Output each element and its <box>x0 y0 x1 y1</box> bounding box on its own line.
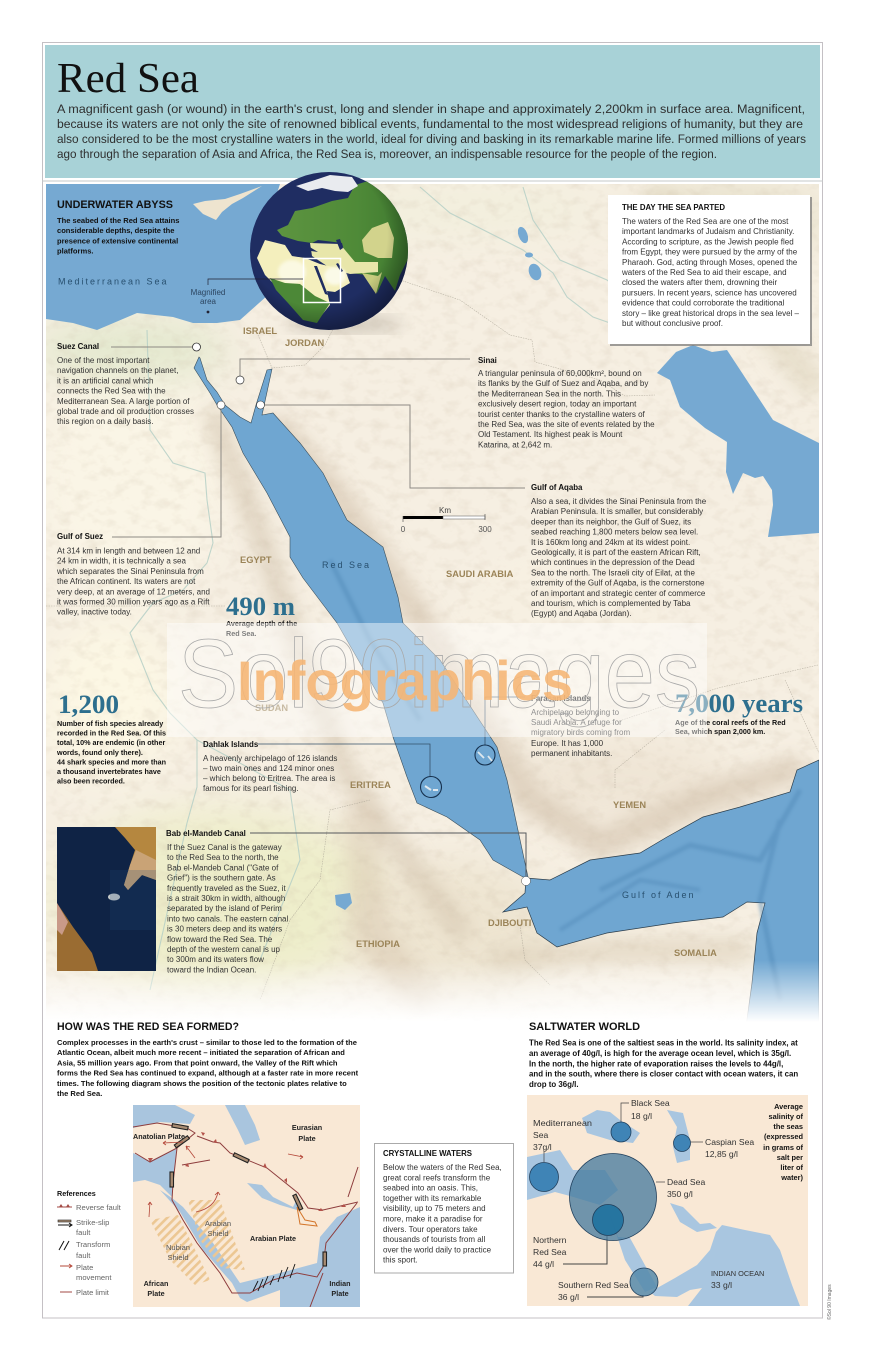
salinity labels: Northern <box>533 1235 567 1245</box>
sea depth shading <box>330 560 800 1000</box>
callout: Farasan Islands: Saudi Arabia. A refuge for <box>531 718 622 727</box>
legend: references: Strike-slip <box>76 1218 109 1227</box>
section: How was the Red Sea formed: forms the Red Sea has continued to expand, although at a faster rate in more recent <box>57 1069 359 1078</box>
salinity note: the seas <box>773 1122 803 1131</box>
callout: The Day the Sea Parted: closed the waters after them, drowning their <box>622 278 778 287</box>
callout: Suez Canal: this region on a daily basis. <box>57 417 154 426</box>
stat: 1,200 fish species: total, 10% are endemic (in other <box>57 738 165 747</box>
plate labels: Anatolian Plate <box>133 1132 185 1141</box>
stat: 1,200 fish species: 1,200 <box>58 690 119 719</box>
stat: 7,000 years: Age of the coral reefs of the Red <box>675 718 786 727</box>
callout: The Day the Sea Parted: but without conclusive proof. <box>622 319 723 328</box>
callout: Bab el-Mandeb Canal: is 30 meters deep and its waters <box>167 925 282 934</box>
rivers <box>130 187 640 990</box>
callout: Gulf of Suez: At 314 km in length and between 12 and <box>57 546 200 556</box>
scale bar: 0 <box>401 525 406 534</box>
callout: Crystalline Waters: together with its remarkable <box>383 1194 482 1203</box>
legend: references: movement <box>76 1273 112 1282</box>
callout: Gulf of Aqaba: (Egypt) and Aqaba (Jordan). <box>531 609 632 618</box>
plate movement arrows <box>148 1141 303 1217</box>
salinity note: salt per <box>777 1153 803 1162</box>
satellite photo: Bab el-Mandeb <box>57 827 156 971</box>
salinity note: liter of <box>780 1163 804 1172</box>
callout: Crystalline Waters: this sport. <box>383 1256 418 1265</box>
globe: Red Sea and gulf <box>314 263 343 295</box>
section: Saltwater World: and in the south, where there is closer contact with ocean waters, it can <box>529 1070 798 1079</box>
transform faults <box>253 1264 295 1291</box>
callout: Sinai: Old Testament. Its highest peak is Mount <box>478 430 623 439</box>
callout: Bab el-Mandeb Canal: into two canals. The eastern canal <box>167 914 288 923</box>
sea labels: Gulf of Aden <box>622 890 696 900</box>
stat: 490 m: 490 m <box>226 592 295 621</box>
globe: Eurasia <box>277 178 410 293</box>
title: Red Sea <box>57 56 199 102</box>
sea labels <box>58 276 696 900</box>
callout: Bab el-Mandeb Canal: frequently traveled as the Suez, it <box>167 884 287 893</box>
plate labels: Indian <box>329 1279 351 1288</box>
salinity labels: Sea <box>533 1130 549 1140</box>
section: How was the Red Sea formed: Complex processes in the earth's crust – similar to those led to the formation of the <box>57 1038 357 1047</box>
callout: Gulf of Aqaba: Arabian Peninsula. It is smaller, but considerably <box>531 507 703 516</box>
salinity labels: Red Sea <box>533 1247 567 1257</box>
Persian Gulf <box>657 345 819 537</box>
country labels <box>240 326 717 958</box>
watermark text: Sol90images <box>178 619 700 728</box>
heading: Underwater Abyss: considerable depths, despite the <box>57 226 174 235</box>
callout: Gulf of Suez: the African continent. Its waters are not <box>57 577 196 586</box>
legend: references: fault <box>76 1251 91 1260</box>
land colour washes <box>30 180 830 1000</box>
callout: Gulf of Aqaba: Sea to the north. The Israeli city of Eilat, at the <box>531 568 695 577</box>
callout: Gulf of Suez: Gulf of Suez <box>57 532 103 541</box>
intro text: also considered to be the most crystalline waters in the world, ideal for diving and basking in its remarkable marine life. Formed millions of years <box>57 132 806 146</box>
globe: Sahara centre <box>278 260 306 284</box>
salinity labels: Dead Sea <box>667 1177 705 1187</box>
plate labels: Plate <box>331 1289 349 1298</box>
mountain ranges <box>215 200 810 1000</box>
callout: Sinai: exclusively desert region, today an important <box>478 400 637 409</box>
callout: Bab el-Mandeb Canal: toward the Indian Ocean. <box>167 965 256 974</box>
globe <box>250 172 410 333</box>
intro text: ago through the separation of Asia and Africa, the Red Sea is, moreover, an indispensable resource for the people of the region. <box>57 147 717 161</box>
callout: Bab el-Mandeb Canal: is a strait 30km in width, although <box>167 894 285 903</box>
legend: references <box>57 1189 122 1297</box>
callout: The Day the Sea Parted: According to scripture, as the Jewish people fled <box>622 237 794 246</box>
header panel <box>45 45 820 178</box>
country labels: SUDAN <box>255 703 288 713</box>
callout: Bab el-Mandeb Canal: to 300m and its waters flow <box>167 955 264 964</box>
callout: Crystalline Waters <box>374 1144 514 1273</box>
callout: Suez Canal: One of the most important <box>57 356 150 365</box>
callout: The Day the Sea Parted: important landmarks of Judaism and Christianity. <box>622 227 794 236</box>
callout: Farasan Islands: permanent inhabitants. <box>531 749 612 758</box>
plate labels: Eurasian <box>292 1123 322 1132</box>
callout: Gulf of Suez: which separates the Sinai Peninsula from <box>56 567 204 576</box>
salinity note: Average <box>774 1102 803 1111</box>
callout: Sinai: A triangular peninsula of 60,000km², bound on <box>478 369 642 378</box>
callout: Bab el-Mandeb Canal: flow toward the Red Sea. The <box>167 935 273 944</box>
callout: Gulf of Aqaba: extremity of the Gulf of Aqaba, is the cornerstone <box>531 579 705 588</box>
country labels: EGYPT <box>240 555 272 565</box>
salinity labels: 350 g/l <box>667 1189 693 1199</box>
salinity labels: 18 g/l <box>631 1111 652 1121</box>
intro text: A magnificent gash (or wound) in the earth's crust, long and slender in shape and approximately 2,200km in surface area. Magnificent, <box>57 102 805 116</box>
legend: references: Plate limit <box>76 1288 110 1297</box>
callout: Sinai <box>236 356 655 449</box>
strike-slip faults <box>170 1124 326 1266</box>
country labels: ETHIOPIA <box>356 939 400 949</box>
callout: The Day the Sea Parted: Pharaoh. God, acting through Moses, opened the <box>622 258 798 267</box>
stat: 1,200 fish species: recorded in the Red Sea. Of this <box>57 729 166 738</box>
scale bar: Km <box>439 506 451 515</box>
heading: Underwater Abyss: The seabed of the Red Sea attains <box>57 216 179 225</box>
magnified area label: Magnified <box>191 288 225 297</box>
section: How was the Red Sea formed: times. The following diagram shows the position of the tectonic plates relative to <box>57 1079 347 1088</box>
salinity labels: INDIAN OCEAN <box>711 1269 764 1278</box>
callout: The Day the Sea Parted <box>608 195 812 346</box>
salinity labels: 12,85 g/l <box>705 1149 738 1159</box>
magnified area label: area <box>200 297 217 306</box>
stat: 1,200 fish species: a thousand invertebrates have <box>57 767 161 776</box>
globe: India <box>362 272 382 294</box>
heading: Underwater Abyss: UNDERWATER ABYSS <box>57 199 173 211</box>
callout: Gulf of Suez: it was formed 30 million years ago as a Rift <box>57 598 210 606</box>
callout: Farasan Islands: Archipelago belonging to <box>531 708 620 717</box>
callout: Bab el-Mandeb Canal: to the Red Sea to the north, the <box>167 853 279 862</box>
watermark veil <box>167 623 707 737</box>
globe: central Africa forest <box>270 278 330 323</box>
salinity labels: Southern Red Sea <box>558 1280 629 1290</box>
callout: The Day the Sea Parted: from Egypt, they were pursued by the army of the <box>622 248 798 257</box>
salinity note: water) <box>780 1173 804 1182</box>
callout: Sinai: tourist center thanks to the crystalline waters of <box>478 410 646 419</box>
sea labels: Mediterranean Sea <box>58 276 169 286</box>
intro text: because its waters are not only the site of renowned biblical events, fundamental to the most widespread religions of humanity, but they are <box>57 117 803 131</box>
water bodies <box>133 1105 360 1307</box>
callout: Gulf of Suez: very deep, at an average of 12 meters, and <box>57 587 210 596</box>
stat: 490 m: Average depth of the <box>226 619 297 628</box>
credit: ©Sol 90 Images <box>826 1284 833 1320</box>
plate labels: Shield <box>167 1253 189 1262</box>
callout: Crystalline Waters: Below the waters of the Red Sea, <box>383 1163 502 1172</box>
callout: The Day the Sea Parted: waters of the Red Sea to aid their escape, and <box>621 268 787 277</box>
plate labels: Arabian Plate <box>250 1234 296 1243</box>
lakes <box>335 225 544 910</box>
callout: Dahlak Islands: – two main ones and 124 minor ones <box>203 764 334 773</box>
heading: Underwater Abyss: presence of extensive continental <box>57 236 178 246</box>
callout: The Day the Sea Parted: pursuers. In recent years, science has uncovered <box>622 288 797 297</box>
callout: Sinai: Katarina, at 2,642 m. <box>478 440 552 449</box>
stat: 1,200 fish species: also been recorded. <box>57 777 125 786</box>
plate labels: Nubian <box>166 1243 190 1252</box>
callout: Gulf of Aqaba: It is 160km long and 24km at its widest point. <box>531 538 690 547</box>
callout: Sinai: the Red Sea, was the site of events related by the <box>478 420 655 429</box>
country borders <box>46 280 820 1000</box>
scale bar <box>401 506 492 534</box>
callout: Farasan Islands: Europe. It has 1,000 <box>531 739 604 748</box>
leader lines <box>544 1103 703 1297</box>
legend: references: References <box>57 1189 96 1198</box>
globe: Central Asia <box>362 222 394 258</box>
section: Saltwater World: drop to 36g/l. <box>529 1080 579 1089</box>
callout: Crystalline Waters: CRYSTALLINE WATERS <box>383 1149 472 1158</box>
scale bar: 300 <box>478 525 492 534</box>
salinity labels: 37g/l <box>533 1142 552 1152</box>
Cyprus <box>193 186 262 220</box>
callout: Bab el-Mandeb Canal: If the Suez Canal is the gateway <box>167 843 282 852</box>
callout: The Day the Sea Parted: The waters of the Red Sea are one of the most <box>622 217 789 226</box>
section: Saltwater World: an average of 40g/l, is high for the average ocean level, which is 35g/l. <box>529 1049 791 1058</box>
callout: Gulf of Aqaba: Geologically, it is part of the eastern African Rift, <box>531 548 701 557</box>
callout: Suez Canal: Mediterranean Sea. A large portion of <box>57 397 190 406</box>
section: Saltwater World: The Red Sea is one of the saltiest seas in the world. Its salinity index, at <box>529 1038 798 1048</box>
salinity labels: 33 g/l <box>711 1280 732 1290</box>
callout: Sinai: Sinai <box>478 356 497 365</box>
callout: Bab el-Mandeb Canal: Grief") is the southern gate. As <box>167 874 276 883</box>
salinity note: in grams of <box>763 1143 804 1152</box>
sea labels: Red Sea <box>322 560 371 570</box>
callout: Farasan Islands: Farasan Islands <box>531 694 591 703</box>
callout: Crystalline Waters: great coral reefs transform the <box>383 1173 491 1182</box>
stat: 490 m: Red Sea. <box>226 629 256 638</box>
Gulf of Aden <box>503 760 819 1034</box>
country labels: ISRAEL <box>243 326 277 336</box>
salinity labels: Caspian Sea <box>705 1137 754 1147</box>
legend: references: fault <box>76 1228 91 1237</box>
callout: Gulf of Suez: valley, inactive today. <box>57 608 132 617</box>
salinity map <box>527 1095 808 1306</box>
callout: Crystalline Waters: more, make it a paradise for <box>383 1214 483 1224</box>
section: Saltwater World: In the north, the higher rate of evaporation raises the levels to 44g/l, <box>529 1059 783 1068</box>
section: Saltwater World <box>529 1021 798 1089</box>
callout: Dahlak Islands <box>203 740 442 798</box>
magnified area label <box>191 279 303 313</box>
salinity note: (expressed <box>764 1132 803 1141</box>
callout: Suez Canal: connects the Red Sea with the <box>57 387 166 396</box>
stat: 1,200 fish species: words, found only there). <box>56 748 143 757</box>
plate labels <box>133 1123 351 1298</box>
callout: Gulf of Aqaba: of an important and strategic center of commerce <box>531 589 706 598</box>
callout: Sinai: the Mediterranean Sea in the north. This <box>478 389 621 398</box>
salinity circles <box>530 1122 690 1296</box>
magnified area square <box>304 258 340 302</box>
callout: Suez Canal: navigation channels on the planet, <box>57 366 178 375</box>
callout: Farasan Islands <box>475 694 630 765</box>
callout: Dahlak Islands: famous for its pearl fishing. <box>203 784 299 793</box>
section: How was the Red Sea formed: the Red Sea. <box>57 1089 102 1098</box>
callout: Gulf of Aqaba: Also a sea, it divides the Sinai Peninsula from the <box>531 497 707 506</box>
callout: Gulf of Aqaba: Gulf of Aqaba <box>531 483 583 492</box>
heading: Underwater Abyss: platforms. <box>57 246 93 256</box>
callout: Gulf of Aqaba: which continues in the depression of the Dead <box>530 558 695 567</box>
relief texture <box>46 184 819 1034</box>
callout: Bab el-Mandeb Canal: depth of the western canal is up <box>167 945 281 954</box>
callout: Suez Canal: global trade and oil production crosses <box>57 407 194 416</box>
callout: Crystalline Waters: visibility, up to 75 meters and <box>383 1204 486 1213</box>
callout: Bab el-Mandeb Canal: Bab el-Mandeb Canal ("Gate of <box>167 863 279 872</box>
callout: Dahlak Islands: Dahlak Islands <box>203 740 259 749</box>
callout: Gulf of Aqaba: seabed reaching 1,800 meters below sea level. <box>531 528 698 537</box>
callout: Sinai: its flanks by the Gulf of Suez and Aqaba, and by <box>478 379 648 388</box>
plate labels: Plate <box>147 1289 165 1298</box>
stat: 7,000 years: 7,000 years <box>675 689 803 718</box>
callout: Farasan Islands: migratory birds coming from <box>531 728 630 737</box>
callout: Gulf of Aqaba <box>256 401 707 618</box>
country labels: ERITREA <box>350 780 391 790</box>
callout: Bab el-Mandeb Canal <box>166 829 530 974</box>
heading: Underwater Abyss <box>57 199 179 256</box>
callout: Bab el-Mandeb Canal: separated by the island of Perim <box>167 904 282 913</box>
callout: Suez Canal: Suez Canal <box>57 342 99 351</box>
callout: Suez Canal: it is an artificial canal which <box>57 376 153 385</box>
callout: Gulf of Aqaba: and tourism, which is complemented by Taba <box>531 599 691 608</box>
stat: 7,000 years: Sea, which span 2,000 km. <box>675 727 765 736</box>
salinity labels: Mediterranean <box>533 1118 592 1128</box>
plate limits <box>133 1123 358 1307</box>
callout: Bab el-Mandeb Canal: Bab el-Mandeb Canal <box>166 829 246 838</box>
plate labels: Plate <box>298 1134 316 1143</box>
callout: The Day the Sea Parted: THE DAY THE SEA PARTED <box>622 203 725 212</box>
callout: Suez Canal <box>57 342 200 426</box>
stat: 490 m <box>226 592 297 638</box>
map bottom fade <box>44 960 821 1022</box>
country labels: YEMEN <box>613 800 646 810</box>
section: How was the Red Sea formed: Asia, 55 million years ago. From that point onward, the Valley of the Rift which <box>57 1058 338 1067</box>
intro text <box>57 102 806 161</box>
salinity note: salinity of <box>768 1112 804 1121</box>
globe: Africa <box>257 240 350 321</box>
callout: Gulf of Suez <box>56 401 225 617</box>
tectonic map <box>133 1105 360 1307</box>
country labels: SAUDI ARABIA <box>446 569 514 579</box>
country labels: JORDAN <box>285 338 325 348</box>
stat: 1,200 fish species: Number of fish species already <box>57 719 163 728</box>
water bodies <box>527 1110 800 1306</box>
section: How was the Red Sea formed: Atlantic Ocean, albeit much more recent – initiated the separation of African and <box>57 1048 345 1057</box>
country labels: SOMALIA <box>674 948 717 958</box>
legend: references: Reverse fault <box>76 1203 122 1212</box>
section: How was the Red Sea formed: HOW WAS THE RED SEA FORMED? <box>57 1021 239 1033</box>
plate labels: Arabian <box>205 1219 231 1228</box>
stat: 1,200 fish species: 44 shark species and more than <box>57 757 166 766</box>
callout: Crystalline Waters: seabed into an oasis. This, <box>383 1184 478 1193</box>
section: Saltwater World: SALTWATER WORLD <box>529 1021 640 1033</box>
callout: Dahlak Islands: A heavenly archipelago of 126 islands <box>203 754 337 763</box>
callout: The Day the Sea Parted: evidence that could corroborate the traditional <box>622 299 785 308</box>
stat: 1,200 fish species <box>56 690 166 786</box>
plate labels: African <box>144 1279 168 1288</box>
callout: Gulf of Aqaba: deeper than its neighbor, the Gulf of Suez, its <box>531 517 691 526</box>
legend: references: Transform <box>76 1240 110 1249</box>
callout: Dahlak Islands: – which belong to Eritrea. The area is <box>203 774 335 783</box>
salinity labels: 44 g/l <box>533 1259 554 1269</box>
map background <box>30 180 830 1034</box>
callout: Gulf of Suez: 24 km in width, it is technically a sea <box>57 557 186 566</box>
Red Sea <box>194 357 528 877</box>
reverse fault teeth <box>148 1132 346 1211</box>
callout: Crystalline Waters: divers. Tour operators take <box>383 1225 478 1234</box>
stat: 7,000 years <box>675 689 803 736</box>
legend: references: Plate <box>76 1263 93 1272</box>
salinity labels: Black Sea <box>631 1098 670 1108</box>
plate labels: Shield <box>207 1229 229 1238</box>
shields hatching <box>188 1200 245 1270</box>
Mediterranean Sea <box>46 184 280 330</box>
watermark text: Infographics <box>237 649 573 712</box>
callout: Crystalline Waters: over the world daily to practice <box>383 1245 492 1254</box>
country labels: DJIBOUTI <box>488 918 531 928</box>
salinity labels: 36 g/l <box>558 1292 579 1302</box>
salinity note <box>763 1102 804 1182</box>
section: How was the Red Sea formed <box>57 1021 359 1098</box>
callout: Crystalline Waters: thousands of tourists from all <box>383 1235 485 1244</box>
salinity labels <box>533 1098 764 1302</box>
callout: The Day the Sea Parted: story – like great historical drops in the sea level – <box>622 309 800 318</box>
globe: Arctic ice <box>296 175 358 192</box>
